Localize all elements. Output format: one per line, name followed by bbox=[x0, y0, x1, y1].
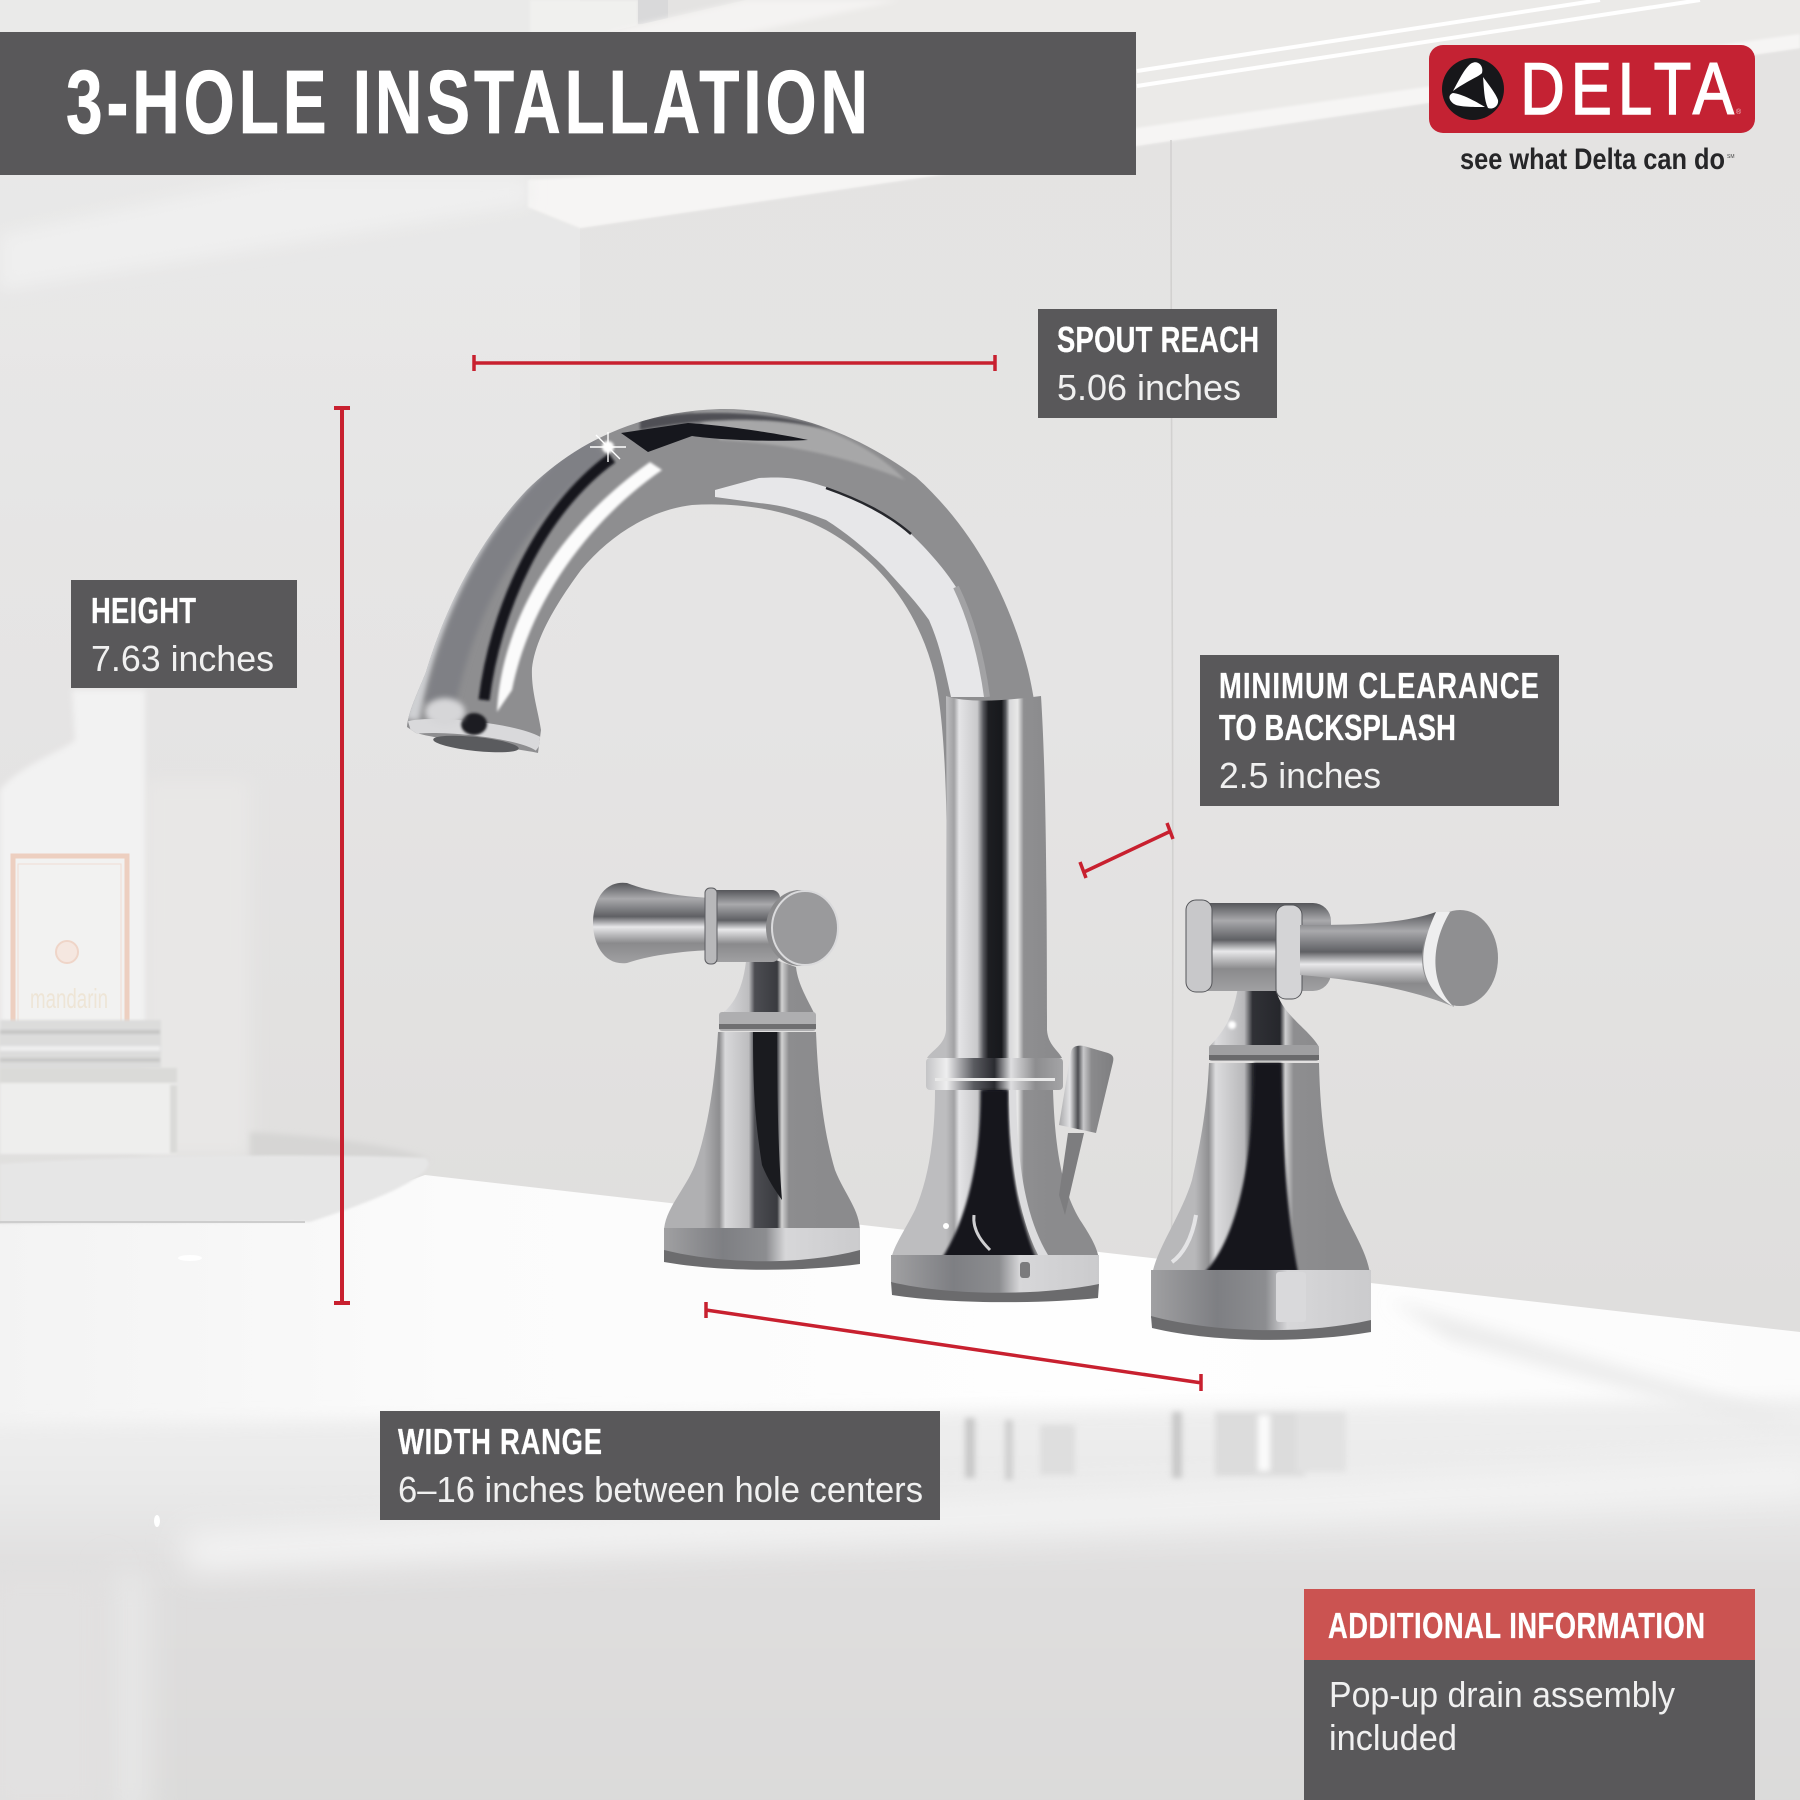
registered mark: ® bbox=[1736, 108, 1742, 116]
label: spout reach: SPOUT REACH bbox=[1057, 319, 1259, 360]
faucet: drain lever bbox=[1059, 1046, 1113, 1215]
faucet bbox=[407, 409, 1498, 1340]
sparkle on basin bbox=[178, 1255, 202, 1261]
lever bbox=[593, 883, 712, 963]
body bbox=[664, 1032, 860, 1232]
faucet reflections on counter bbox=[965, 1412, 1346, 1480]
label: minimum clearance bbox=[1200, 655, 1559, 806]
panel body: included bbox=[1329, 1717, 1457, 1758]
plate bbox=[0, 1132, 430, 1224]
aerator bbox=[433, 733, 519, 755]
tagline: see what Delta can do bbox=[1460, 143, 1725, 176]
bottle bbox=[0, 690, 145, 1030]
label: height bbox=[71, 580, 297, 688]
label: height: 7.63 inches bbox=[91, 638, 274, 679]
window frame and sill molding bbox=[0, 0, 1800, 290]
lever bbox=[1188, 903, 1331, 991]
faucet: left handle bbox=[593, 883, 860, 1270]
label: width range: 6–16 inches between hole centers bbox=[398, 1469, 923, 1510]
dimension line: width range bbox=[706, 1302, 1202, 1391]
body bbox=[1151, 1063, 1371, 1285]
title banner bbox=[0, 32, 1136, 175]
label: spout reach bbox=[1038, 309, 1277, 418]
tile seam bbox=[1171, 140, 1173, 1300]
dimension line: height bbox=[334, 407, 350, 1304]
neck bbox=[720, 950, 815, 1015]
dimension line: minimum clearance bbox=[1080, 823, 1173, 878]
countertop bbox=[0, 1175, 1800, 1460]
lighter wall section at left bbox=[0, 0, 580, 800]
panel: additional information bbox=[1304, 1589, 1755, 1800]
sparkle bbox=[590, 432, 626, 462]
counter front face bbox=[0, 1398, 1800, 1800]
faucet: spout bbox=[407, 409, 1034, 818]
wall bbox=[0, 0, 1800, 1400]
logo plate bbox=[1429, 45, 1755, 133]
faucet: right handle bbox=[1151, 900, 1498, 1340]
dimension line: spout reach bbox=[474, 355, 995, 371]
label: minimum clearance: 2.5 inches bbox=[1219, 755, 1381, 796]
blurred toiletries at left bbox=[0, 690, 430, 1224]
jar bbox=[0, 1068, 177, 1154]
panel heading bbox=[1304, 1589, 1755, 1660]
panel body bbox=[1304, 1660, 1755, 1800]
label: minimum clearance: MINIMUM CLEARANCE bbox=[1219, 665, 1539, 706]
faucet: spout shaft bbox=[946, 696, 1047, 1037]
bottle label: mandarin bbox=[30, 983, 108, 1014]
service mark: SM bbox=[1727, 154, 1734, 160]
label: height: HEIGHT bbox=[91, 590, 196, 631]
label: width range bbox=[380, 1411, 940, 1520]
rounded highlight on sink edge bbox=[184, 1476, 1800, 1552]
title banner: 3-HOLE INSTALLATION bbox=[66, 52, 868, 152]
panel body: Pop-up drain assembly bbox=[1329, 1674, 1675, 1715]
shadow streak on counter bbox=[1390, 1300, 1800, 1425]
wordmark: DELTA bbox=[1520, 49, 1734, 130]
label: spout reach: 5.06 inches bbox=[1057, 367, 1241, 408]
label: minimum clearance: TO BACKSPLASH bbox=[1219, 707, 1456, 748]
glass reflection column bbox=[145, 780, 250, 1155]
panel heading: ADDITIONAL INFORMATION bbox=[1328, 1605, 1705, 1646]
icon: delta tri-petal emblem bbox=[1442, 58, 1504, 120]
bottle label bbox=[13, 856, 127, 1026]
faucet: shaft base bbox=[891, 1030, 1099, 1302]
Delta logo bbox=[1429, 45, 1755, 176]
label: width range: WIDTH RANGE bbox=[398, 1421, 602, 1462]
neck bbox=[1209, 970, 1319, 1047]
jar lid bbox=[0, 1020, 161, 1068]
